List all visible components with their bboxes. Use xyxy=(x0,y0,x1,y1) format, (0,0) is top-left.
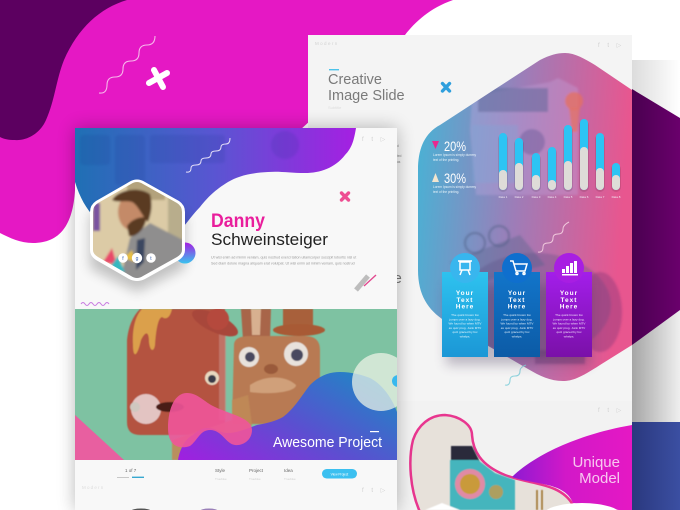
card text: Your xyxy=(508,290,526,297)
teal squiggle xyxy=(505,365,526,385)
stat: 30 percent xyxy=(432,170,476,194)
heading accent xyxy=(329,69,339,70)
gradient hexagon xyxy=(418,53,632,381)
title dash xyxy=(370,431,379,432)
card: purple one xyxy=(546,253,592,357)
metadata columns: Trueblue xyxy=(249,477,261,481)
card: blue one: ax quiz prog. Junk MTV xyxy=(449,326,482,330)
metadata columns: Idea xyxy=(284,468,293,473)
card: blue one: quiz graced by fox xyxy=(452,330,478,334)
view project button xyxy=(322,469,357,478)
heading: Image Slide xyxy=(328,88,405,104)
stat: 20 percent: 20% xyxy=(444,138,466,154)
profile photo hexagon: t xyxy=(150,256,152,262)
gradient header blob xyxy=(75,128,356,240)
hidden body fragments: ted xyxy=(397,154,402,158)
panel: unique model xyxy=(397,401,632,510)
metadata columns xyxy=(215,468,296,481)
gradient wave blob xyxy=(178,372,397,460)
metadata columns: Style xyxy=(215,468,226,473)
card text: Here xyxy=(456,304,474,310)
bar chart: Data 2 xyxy=(515,195,524,199)
right dark purple shape xyxy=(632,89,680,345)
bar chart: Data 1 xyxy=(499,195,508,199)
stat: 20 percent xyxy=(432,138,476,162)
right blue block xyxy=(632,422,680,510)
card: purple one: ax quiz prog. Junk MTV xyxy=(553,326,586,330)
hidden body fragments: as xyxy=(397,160,401,164)
bio text: Ut wisi enim ad minim veniam, quis nostrud exerci tation ullamcorper suscipit lobortis nisl ut xyxy=(211,256,356,260)
pink triangle xyxy=(75,415,124,460)
bar chart: Data 7 xyxy=(596,195,605,199)
bar chart: Data 4 xyxy=(548,195,557,199)
next slide peek circles xyxy=(131,508,218,510)
card: blue one: The quick brown fox xyxy=(451,313,479,317)
decorative slashes xyxy=(356,275,376,290)
hidden body fragments: d xyxy=(397,144,399,148)
card text: Your xyxy=(560,290,578,297)
card text: Text xyxy=(509,297,525,304)
title: Unique xyxy=(572,454,620,471)
icon: blue cross xyxy=(442,84,450,91)
pale translucent circle xyxy=(352,353,397,411)
card: dark blue one xyxy=(494,253,540,357)
chocolate rabbit character xyxy=(172,309,325,460)
icon: presentation board xyxy=(458,261,472,275)
metadata columns: Trueblue xyxy=(215,477,227,481)
icon: bar graph xyxy=(562,261,578,276)
bar chart: Data 5 xyxy=(564,195,573,199)
pager: 1 of 7 xyxy=(125,468,137,473)
card text: Text xyxy=(561,297,577,304)
card text: Text xyxy=(457,297,473,304)
right side shadow xyxy=(632,60,680,425)
stat: 30 percent: Lorem Ipsum is simply dummy xyxy=(433,185,476,189)
card: blue one: We found by when MTV xyxy=(449,322,482,326)
card: purple one: quiz graced by fox xyxy=(556,330,582,334)
card: dark blue one: ax quiz prog. Junk MTV xyxy=(501,326,534,330)
card: dark blue one: We found by when MTV xyxy=(501,322,534,326)
profile photo hexagon: g xyxy=(136,256,139,262)
metadata columns: Trueblue xyxy=(284,477,296,481)
left card shadow xyxy=(75,128,397,510)
bio text: Sed diam dolore magna aliquam erat volutpat. Ut wisi enim ad minim veniam, quis nostrud xyxy=(211,262,355,266)
title: Awesome Project xyxy=(273,434,383,451)
animal image overlay xyxy=(450,226,622,364)
social icons: f t ▷ xyxy=(362,488,388,494)
portrait photo xyxy=(93,182,182,278)
subtitle: Subtitle xyxy=(328,105,342,110)
profile hexagon shadow xyxy=(90,190,185,292)
social icons: f t ▷ xyxy=(362,137,388,143)
purple squiggle xyxy=(81,302,109,306)
card: blue one: whelps. xyxy=(460,334,470,338)
card shadows xyxy=(446,285,590,365)
background magenta blob xyxy=(0,0,453,243)
social icons: f t ▷ xyxy=(598,408,624,414)
small gradient dot xyxy=(174,242,196,264)
card: dark blue one: The quick brown fox xyxy=(503,313,531,317)
metadata columns: Project xyxy=(249,468,264,473)
card: dark blue one: whelps. xyxy=(512,334,522,338)
social buttons xyxy=(118,253,156,263)
partial hidden word: e xyxy=(394,270,402,287)
card: purple one: whelps. xyxy=(564,334,574,338)
squiggle on header xyxy=(186,138,230,172)
view project button: View Project xyxy=(331,472,348,476)
stat: 30 percent: 30% xyxy=(444,170,466,186)
brand label: Modern xyxy=(82,485,104,490)
profile photo hexagon: f xyxy=(122,256,124,262)
translucent pink blob xyxy=(168,393,252,447)
surname: Schweinsteiger xyxy=(211,230,328,249)
header faint radio image xyxy=(80,131,299,185)
stat: 30 percent: text of the printing. xyxy=(433,190,459,194)
panel: creative image slide xyxy=(308,35,632,401)
bar chart xyxy=(498,119,621,199)
stat: 20 percent: Lorem Ipsum is simply dummy xyxy=(433,153,476,157)
project image xyxy=(75,304,410,460)
brand label: Modern xyxy=(315,41,339,46)
background dark purple blob xyxy=(0,0,127,140)
card: purple one: jumps over a lazy dog. xyxy=(553,317,585,321)
card text: Your xyxy=(456,290,474,297)
bar chart: Data 8 xyxy=(612,195,621,199)
card text: Here xyxy=(560,304,578,310)
decorative white squiggle xyxy=(99,36,155,93)
card: purple one: We found by when MTV xyxy=(553,322,586,326)
profile photo hexagon xyxy=(90,180,185,281)
cyan dot xyxy=(392,375,397,387)
card: blue one: jumps over a lazy dog. xyxy=(449,317,481,321)
name: Danny xyxy=(211,211,265,232)
card: dark blue one: jumps over a lazy dog. xyxy=(501,317,533,321)
stat: 20 percent: text of the printing. xyxy=(433,158,459,162)
panel: profile card xyxy=(75,128,410,510)
pager xyxy=(117,468,144,478)
heading: Creative xyxy=(328,72,382,88)
icon: shopping cart xyxy=(510,261,527,274)
icon: pink cross xyxy=(342,193,348,200)
squiggle on hexagon xyxy=(538,222,569,252)
title: Model xyxy=(579,470,620,487)
popsicle character xyxy=(127,304,241,435)
icon: white cross xyxy=(149,70,167,87)
card text: Here xyxy=(508,304,526,310)
pink outlined image blob xyxy=(410,415,573,510)
card: purple one: The quick brown fox xyxy=(555,313,583,317)
vintage radio image overlay xyxy=(470,78,583,195)
bar chart: Data 3 xyxy=(532,195,541,199)
teal machine image xyxy=(425,446,542,510)
bar chart: Data 6 xyxy=(580,195,589,199)
white base blob xyxy=(546,503,618,510)
card: blue one xyxy=(442,253,488,357)
social icons: f t ▷ xyxy=(598,43,624,49)
magenta shape xyxy=(512,425,632,510)
card: dark blue one: quiz graced by fox xyxy=(504,330,530,334)
